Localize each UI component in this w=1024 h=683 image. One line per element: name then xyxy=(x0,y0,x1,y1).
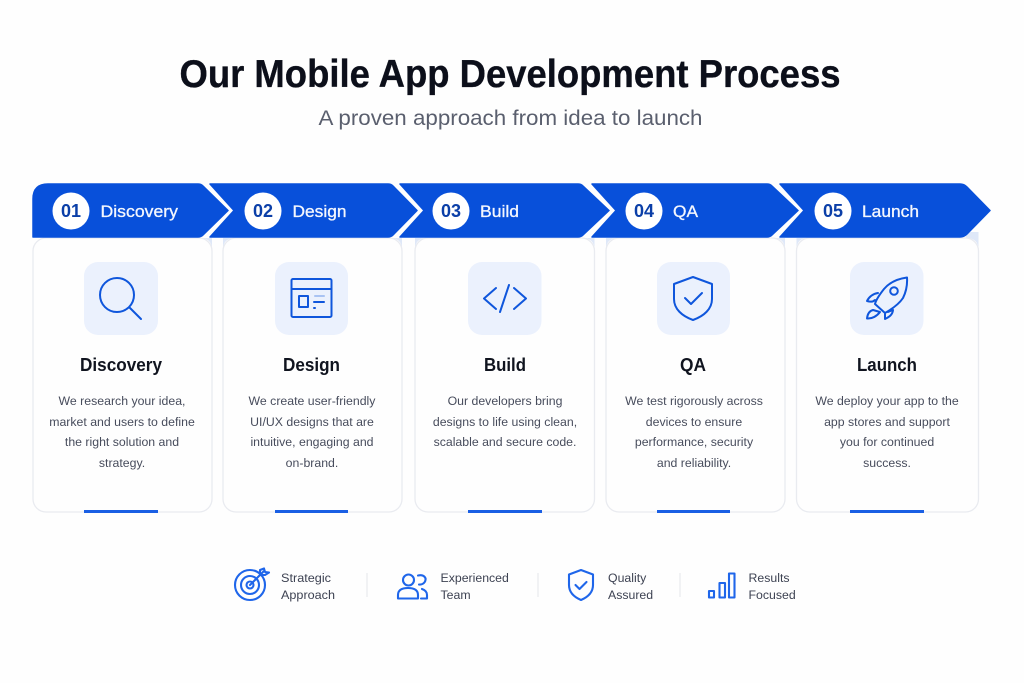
text: design description: UI/UX designs that are xyxy=(250,415,374,429)
process step: 01 Discovery: Discovery xyxy=(100,203,179,221)
text: discovery description xyxy=(49,394,195,470)
text: launch description: success. xyxy=(863,456,911,470)
text: qa description: performance, security xyxy=(635,435,754,449)
benefit: experienced team: Team xyxy=(440,588,471,602)
benefit: quality assured: Quality xyxy=(608,571,647,585)
text: qa description: devices to ensure xyxy=(646,415,742,429)
title: Our Mobile App Development Process xyxy=(180,53,840,96)
text: qa description xyxy=(625,394,763,470)
text: discovery description: strategy. xyxy=(99,456,145,470)
heading: design: Design xyxy=(283,355,340,375)
panel: launch card xyxy=(796,232,978,513)
panel: design card xyxy=(223,238,402,513)
process step: 04 QA xyxy=(592,184,798,237)
benefit: strategic approach: Approach xyxy=(281,588,335,602)
text: build description: designs to life using clean, xyxy=(433,415,577,429)
process step: 04 QA: QA xyxy=(673,203,698,221)
benefit: results focused xyxy=(709,571,796,602)
icon: rocket xyxy=(850,262,924,335)
text: qa description: We test rigorously across xyxy=(625,394,763,408)
icon: code brackets xyxy=(468,262,542,335)
text: build description xyxy=(433,394,577,449)
heading: discovery: Discovery xyxy=(80,355,162,375)
process step: 02 Design: Design xyxy=(292,203,346,221)
text: launch description: We deploy your app to the xyxy=(815,394,959,408)
panel: discovery card xyxy=(33,238,212,513)
process step: 05 Launch xyxy=(780,184,990,237)
text: build description: scalable and secure code. xyxy=(434,435,576,449)
process step: 02 Design: 02 xyxy=(253,201,273,221)
text: design description: We create user-friendly xyxy=(249,394,376,408)
icon: shield check xyxy=(657,262,730,335)
process step: 05 Launch: Launch xyxy=(862,203,919,221)
text: launch description: you for continued xyxy=(840,435,934,449)
text: launch description xyxy=(815,394,959,470)
panel: qa card xyxy=(606,238,785,513)
footer benefits row xyxy=(235,568,796,602)
text: discovery description: We research your idea, xyxy=(59,394,185,408)
icon: interface window xyxy=(275,262,348,335)
benefit: experienced team: Experienced xyxy=(440,571,509,585)
process step: 05 Launch: 05 xyxy=(823,201,843,221)
text: discovery description: market and users to define xyxy=(49,415,195,429)
benefit: strategic approach xyxy=(235,568,335,602)
benefit: experienced team xyxy=(398,571,509,602)
subtitle: A proven approach from idea to launch xyxy=(318,106,702,130)
benefit: results focused: Focused xyxy=(748,588,796,602)
process step: 04 QA: 04 xyxy=(634,201,654,221)
process step: 03 Build xyxy=(400,184,609,237)
benefit: quality assured xyxy=(569,570,653,602)
heading: qa: QA xyxy=(680,355,706,375)
process step: 03 Build: 03 xyxy=(441,201,461,221)
text: build description: Our developers bring xyxy=(448,394,563,408)
process step: 01 Discovery: 01 xyxy=(61,201,81,221)
text: discovery description: the right solution and xyxy=(65,435,179,449)
process step: 03 Build: Build xyxy=(480,203,519,221)
icon: magnifier xyxy=(84,262,158,335)
text: design description xyxy=(249,394,376,470)
process step: 01 Discovery xyxy=(33,184,228,237)
heading: build: Build xyxy=(484,355,526,375)
benefit: quality assured: Assured xyxy=(608,588,653,602)
panel: build card xyxy=(415,238,594,513)
text: design description: on-brand. xyxy=(286,456,338,470)
benefit: results focused: Results xyxy=(748,571,790,585)
process step: 02 Design xyxy=(210,184,417,237)
text: launch description: app stores and support xyxy=(824,415,950,429)
text: qa description: and reliability. xyxy=(657,456,731,470)
heading: launch: Launch xyxy=(857,355,917,375)
benefit: strategic approach: Strategic xyxy=(281,571,331,585)
text: design description: intuitive, engaging and xyxy=(250,435,374,449)
